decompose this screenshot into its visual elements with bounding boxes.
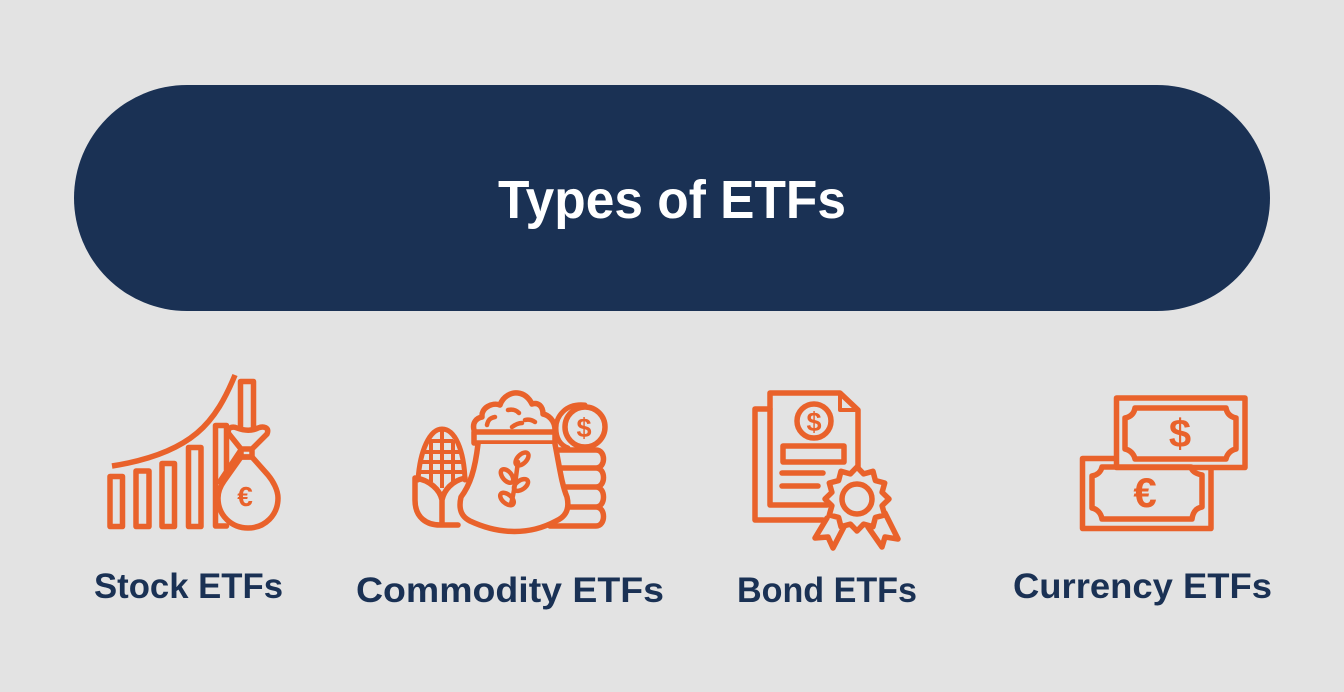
icon: bond document with seal (755, 393, 898, 548)
label: commodity: Commodity ETFs (356, 571, 664, 610)
title: Types of ETFs (498, 170, 846, 230)
grain pile (474, 393, 555, 430)
label: stock: Stock ETFs (94, 567, 283, 606)
label: bond: Bond ETFs (737, 571, 917, 610)
rear coin edge (556, 405, 585, 448)
stacked coins (550, 450, 604, 526)
dollar sign: $ (1169, 412, 1191, 456)
plant sprout (498, 450, 531, 508)
icon: stock chart with euro money bag (110, 375, 278, 528)
front coin (565, 407, 605, 447)
icon: dollar and euro banknotes (1082, 398, 1245, 528)
title banner (74, 85, 1270, 311)
euro sign: € (237, 481, 253, 512)
euro sign: € (1133, 469, 1157, 516)
label: currency: Currency ETFs (1013, 567, 1272, 606)
icon: commodity sack, corn and coins (415, 393, 605, 532)
dollar sign: $ (806, 407, 822, 437)
dollar sign: $ (576, 413, 592, 443)
